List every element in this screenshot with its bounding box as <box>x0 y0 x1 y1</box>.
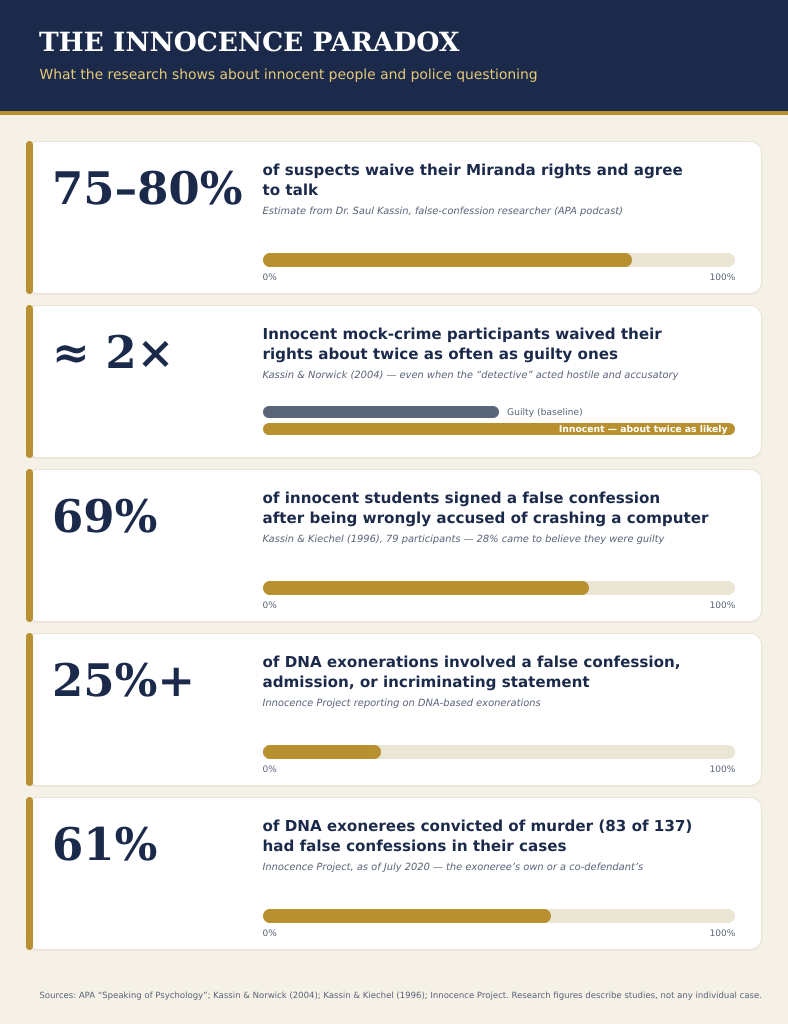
big number: 69% <box>52 490 157 543</box>
accent bar <box>26 469 33 622</box>
accent bar <box>26 141 33 294</box>
source note: Estimate from Dr. Saul Kassin, false-confession researcher (APA podcast) <box>262 206 623 217</box>
statement: admission, or incriminating statement <box>262 673 590 691</box>
panel: murder exonerees statistic <box>26 797 762 950</box>
source note: Innocence Project, as of July 2020 — the exoneree’s own or a co-defendant’s <box>262 862 643 873</box>
progress bar: 25% <box>262 744 735 759</box>
big number: 61% <box>52 818 157 871</box>
scale label: 100%: 100% <box>710 928 735 938</box>
statement <box>262 161 683 199</box>
statement <box>262 653 680 691</box>
subtitle: What the research shows about innocent people and police questioning <box>40 66 538 82</box>
statement: after being wrongly accused of crashing a computer <box>262 509 708 527</box>
accent bar <box>26 797 33 950</box>
statement: of DNA exonerations involved a false confession, <box>262 653 680 671</box>
statement: of suspects waive their Miranda rights and agree <box>262 161 683 179</box>
bar: guilty baseline <box>262 406 498 418</box>
statement: of innocent students signed a false confession <box>262 489 660 507</box>
statement: to talk <box>262 181 318 199</box>
big number: ≈ 2× <box>52 326 174 379</box>
scale label: 100%: 100% <box>710 272 735 282</box>
scale label: 100%: 100% <box>710 764 735 774</box>
statement: rights about twice as often as guilty ones <box>262 345 618 363</box>
progress bar: 78% <box>262 252 735 267</box>
bar: innocent: Innocent — about twice as likely <box>559 424 728 435</box>
bar label: guilty: Guilty (baseline) <box>507 407 583 418</box>
statement: had false confessions in their cases <box>262 837 566 855</box>
accent bar <box>26 305 33 458</box>
header banner <box>0 0 788 115</box>
panel: twice as often statistic <box>26 305 762 458</box>
scale label: 100%: 100% <box>710 600 735 610</box>
source note: Kassin & Kiechel (1996), 79 participants — 28% came to believe they were guilty <box>262 534 664 545</box>
accent bar <box>26 633 33 786</box>
panel: false confession experiment statistic <box>26 469 762 622</box>
source note: Kassin & Norwick (2004) — even when the “detective” acted hostile and accusatory <box>262 370 678 381</box>
scale label: 0%: 0% <box>262 272 277 282</box>
statement: of DNA exonerees convicted of murder (83 of 137) <box>262 817 692 835</box>
statement <box>262 817 692 855</box>
statement <box>262 489 708 527</box>
bar: innocent <box>262 423 735 435</box>
scale label: 0%: 0% <box>262 764 277 774</box>
big number: 75–80% <box>52 162 243 215</box>
scale label: 0%: 0% <box>262 600 277 610</box>
progress bar: 61% <box>262 908 735 923</box>
statement <box>262 325 662 363</box>
statement: Innocent mock-crime participants waived their <box>262 325 662 343</box>
panel: DNA exonerations statistic <box>26 633 762 786</box>
source note: Innocence Project reporting on DNA-based exonerations <box>262 698 541 709</box>
scale label: 0%: 0% <box>262 928 277 938</box>
progress bar: 69% <box>262 580 735 595</box>
big number: 25%+ <box>52 654 195 707</box>
panel: Miranda waiver statistic <box>26 141 762 294</box>
footer sources: Sources: APA “Speaking of Psychology”; Kassin & Norwick (2004); Kassin & Kiechel (1996); Innocence Project. Research figures describe studies, not any individual case. <box>40 991 762 1001</box>
title: THE INNOCENCE PARADOX <box>39 27 459 58</box>
